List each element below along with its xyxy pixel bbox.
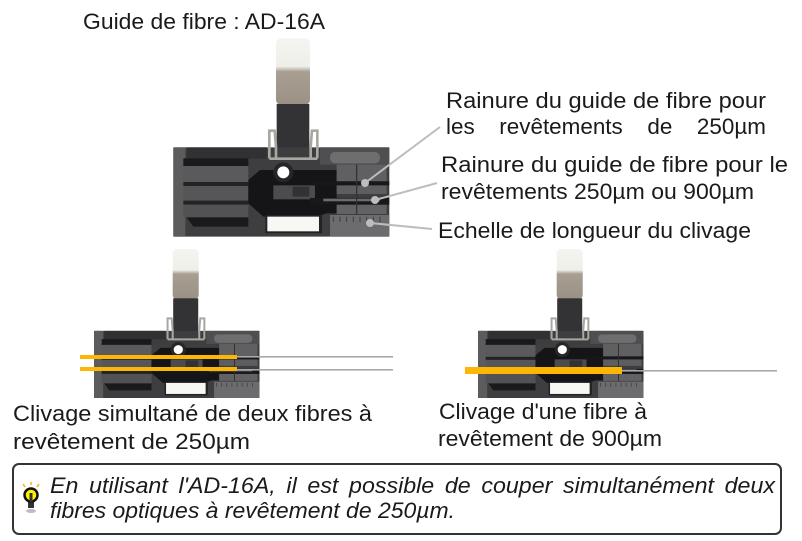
label: two fibre cleaving: Clivage simultané de deux fibres à bbox=[13, 401, 373, 426]
label: 250µm groove: Rainure du guide de fibre pour bbox=[446, 88, 766, 113]
label: single fibre cleaving: revêtement de 900µm bbox=[438, 426, 662, 451]
label: 250 or 900µm groove: Rainure du guide de fibre pour le bbox=[441, 152, 788, 177]
fibre coating: orange bar bbox=[465, 367, 622, 374]
callout arrow: cleave length scale bbox=[366, 219, 432, 229]
label: 250µm groove bbox=[446, 88, 766, 139]
diagram: single fibre cleaving bbox=[465, 249, 777, 398]
label: 250 or 900µm groove: revêtements 250µm ou 900µm bbox=[441, 179, 754, 204]
diagram: two fibre cleaving bbox=[80, 249, 393, 398]
label: two fibre cleaving bbox=[13, 401, 373, 454]
fibre coatings: two orange bars bbox=[80, 355, 237, 371]
note box bbox=[13, 464, 781, 534]
note text: En utilisant l'AD-16A, il est possible de couper simultanément deux bbox=[50, 473, 776, 498]
label: two fibre cleaving: revêtement de 250µm bbox=[13, 429, 250, 454]
fibre strand: single bbox=[620, 370, 777, 372]
title: Guide de fibre : AD-16A bbox=[83, 9, 325, 34]
note text bbox=[50, 473, 776, 523]
icon: light bulb bbox=[23, 482, 39, 513]
label: cleave length scale: Echelle de longueur du clivage bbox=[438, 218, 751, 243]
label: 250µm groove: les revêtements de 250µm bbox=[446, 114, 766, 139]
label: 250 or 900µm groove bbox=[441, 152, 788, 204]
diagram: AD-16A fibre guide bbox=[173, 38, 389, 237]
callout arrow: 250µm groove bbox=[361, 127, 440, 187]
callout arrow: 250/900µm groove bbox=[371, 183, 437, 204]
note text: fibres optiques à revêtement de 250µm. bbox=[50, 498, 455, 523]
label: single fibre cleaving: Clivage d'une fibre à bbox=[439, 399, 648, 424]
fibre strands: two 250µm bbox=[236, 356, 393, 371]
label: single fibre cleaving bbox=[438, 399, 662, 451]
